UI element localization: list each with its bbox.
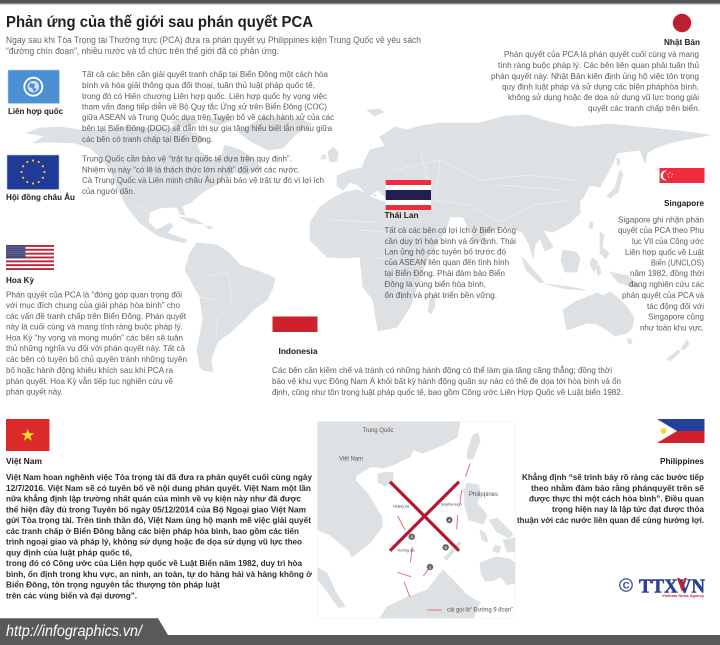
text block: tác động đối với — [647, 301, 704, 311]
text block: trình ngoại giao và pháp lý, không sử dụng hoặc đe dọa sử dụng vũ lực theo — [6, 536, 302, 546]
text block: thuận với các nước liên quan để cùng hướng lợi. — [517, 515, 704, 525]
text block — [272, 364, 623, 397]
text block: định, cũng như tôn trọng luật pháp quốc tế, bao gồm Công ước Liên Hợp Quốc về Luật biển 1982. — [272, 387, 623, 397]
text block: phán quyết này. — [6, 386, 63, 396]
logo: TTXVN: C — [623, 580, 630, 592]
text block: lục VII của Công ước — [632, 236, 704, 246]
footer bar — [0, 618, 720, 645]
text block: theo nhằm đảm bảo rằng phánquyết trên sẽ — [531, 482, 704, 493]
text block: Cả Trung Quốc và Liên minh châu Âu phải bảo vệ trật tự đó vì lợi ích — [82, 175, 324, 185]
logo: TTXVN: TTXVN — [639, 576, 706, 598]
chart: South China Sea map — [318, 422, 515, 618]
text block: các bên có tuyên bố chủ quyền tránh những tuyên — [6, 354, 187, 364]
panel: Singapore — [618, 168, 705, 332]
text block: trên các vùng biển và đại dương”. — [6, 590, 137, 600]
icon: Singapore flag — [660, 168, 704, 183]
text block — [491, 49, 700, 113]
label: Nhật Bản — [664, 37, 700, 47]
label: Hoa Kỳ — [6, 275, 34, 285]
text block: Hoa Kỳ “hy vọng và mong muốn” các bên sẽ tuân — [6, 332, 183, 342]
map labels: Scarborough — [441, 502, 462, 506]
text block: Các bên cần kiềm chế và tránh có những hành động có thể làm gia tăng căng thẳng; đồng thời — [272, 364, 612, 375]
panel: Indonesia — [272, 316, 623, 397]
text block: Biển Đông, tôn trọng nguyên tắc thượng tôn pháp luật — [6, 578, 220, 590]
numbered markers: 4 — [448, 518, 451, 522]
numbered markers — [408, 517, 452, 570]
text block — [517, 471, 704, 525]
text block: Việt Nam hoan nghênh việc Tòa trọng tài đã đưa ra phán quyết cuối cùng ngày — [6, 472, 312, 482]
panel: Việt Nam — [6, 419, 312, 600]
text block: Sigapore ghi nhận phán — [618, 214, 704, 224]
panel: Hội đồng châu Âu — [6, 154, 324, 202]
map labels: Việt Nam — [339, 456, 363, 462]
icon: Thailand flag — [386, 180, 431, 210]
text block: Phán quyết của PCA là phán quyết cuối cùng và mang — [504, 49, 699, 59]
map labels: Hoàng Sa — [393, 504, 409, 508]
text block — [384, 225, 516, 300]
text block: Tất cả các bên cần giải quyết tranh chấp tại Biển Đông một cách hòa — [82, 69, 328, 79]
numbered markers: 2 — [411, 535, 413, 539]
land masses — [318, 422, 515, 618]
text block: Liên hợp quốc về Luật — [625, 247, 705, 257]
text block: phán quyết. Hoa Kỳ vẫn tiếp tục nghiên cứu về — [6, 376, 173, 386]
icon: US flag — [6, 245, 54, 270]
text block: tại Biển Đông. Phải đảm bảo Biển — [384, 268, 505, 278]
text block: bên tại Biển Đông (DOC) sẽ dẫn tới sự gia tăng hiểu biết lẫn nhau giữa — [82, 123, 332, 133]
label: Singapore — [664, 198, 704, 208]
text block: phán quyết của PCA và — [622, 290, 704, 300]
text block: thể hiện đầy đủ trong Tuyên bố ngày 05/12/2014 của Bộ Ngoại giao Việt Nam — [6, 504, 306, 514]
title: Phản ứng của thế giới sau phán quyết PCA — [6, 14, 313, 31]
map labels: Trung Quốc — [362, 428, 394, 434]
text block: của người dân. — [82, 186, 135, 196]
text block: các vấn đề tranh chấp trên Biển Đông. Phán quyết — [6, 311, 187, 321]
text block: các bên có tranh chấp tại Biển Đông. — [82, 134, 213, 144]
text block: trọng hiện nay là lập tức đạt được thỏa — [552, 504, 704, 514]
text block: tính ràng buộc pháp lý. Các bên liên quan phải tuân thủ — [498, 60, 699, 70]
text block: ổn định và phát triển bền vững. — [384, 290, 497, 300]
text block: Đông là vùng biển hòa bình, — [384, 279, 486, 289]
map labels: cái gọi là“ Đường 9 đoạn” — [447, 608, 513, 614]
map labels: Philippines — [469, 492, 498, 498]
icon: UN flag — [8, 70, 60, 104]
text block: trong đó có Hiến chương Liên hợp quốc. Liên hợp quốc hy vọng việc — [82, 91, 327, 101]
label: Indonesia — [278, 346, 318, 356]
nine-dash line — [397, 463, 470, 597]
label: Việt Nam — [6, 456, 42, 466]
panel: Liên hợp quốc — [8, 69, 334, 144]
intro text: Ngay sau khi Tòa Trọng tài Thường trực (PCA) đưa ra phán quyết vụ Philippines kiện Trung Quốc về yêu sách — [6, 35, 421, 46]
label: Philippines — [660, 456, 704, 466]
label: Liên hợp quốc — [8, 106, 63, 116]
text block: các tranh chấp ở Biển Đông bằng các biện pháp hòa bình, bao gồm các tiến — [6, 525, 299, 536]
text block: Khẳng định “sẽ trình bày rõ ràng các bước tiếp — [522, 471, 704, 482]
text block: quy định luật pháp và sử dụng các biện pháphòa bình, — [502, 82, 699, 92]
text block: bình, ổn định trong khu vực, an ninh, an toàn, tự do hàng hải và hàng không ở — [6, 569, 312, 579]
text block: Nhiệm vụ này “có lẽ là thách thức lớn nhất” đối với các nước. — [82, 164, 300, 174]
label: Hội đồng châu Âu — [6, 191, 75, 202]
text block: Lan ủng hộ các tuyên bố trước đó — [384, 246, 506, 256]
text block — [618, 214, 705, 332]
map legend line — [428, 609, 442, 611]
text block: không sử dụng hoặc đe dọa sử dụng vũ lực trong giải — [508, 92, 699, 102]
icon: Philippines flag — [657, 419, 704, 443]
text block: phán quyết này. Nhật Bản kiên định ủng hộ việc tôn trọng — [491, 71, 699, 81]
text block: Tất cả các bên có lợi ích ở Biển Đông — [384, 225, 516, 235]
text block: Singapore cũng — [648, 312, 704, 322]
text block: thủ những nghĩa vụ đối với phán quyết này. Tất cả — [6, 343, 185, 353]
text block: của ASEAN liên quan đến tình hình — [384, 257, 509, 267]
text block: trong đó có Công ước của Liên hợp quốc về Luật Biển năm 1982, duy trì hòa — [6, 558, 302, 568]
text block: giữa ASEAN và Trung Quốc dựa trên Tuyên bố về cách hành xử của các — [82, 112, 334, 122]
text block: Biển (UNCLOS) — [651, 258, 704, 268]
map labels — [339, 428, 513, 614]
intro text: “đường chín đoạn”, nhiều nước và tổ chức trên thế giới đã có phản ứng. — [6, 46, 279, 57]
text block — [6, 472, 312, 600]
panel: Thái Lan — [384, 180, 516, 300]
red cross — [390, 482, 459, 551]
text block: quyết của PCA theo Phụ — [618, 225, 704, 235]
panel: Philippines — [517, 419, 704, 525]
text block: nữa khẳng định lập trường nhất quán của mình về vụ kiện này như đã được — [6, 492, 301, 504]
text block: năm 1982, đồng thời — [630, 268, 704, 278]
text block: Phán quyết của PCA là “đóng góp quan trọng đối — [6, 290, 182, 300]
numbered markers: 3 — [445, 546, 447, 550]
text block: bảo vệ khu vực Đông Nam Á khỏi bất kỳ hành động quân sự nào có thể đe dọa tới hòa bình và ổn — [272, 376, 621, 386]
text block: được thực thi một cách hòa bình”. Điều quan — [529, 494, 704, 504]
logo: TTXVN: Vietnam News Agency — [662, 594, 705, 598]
text block — [6, 290, 187, 396]
icon: Indonesia flag — [272, 316, 318, 332]
text block: này là cuối cùng và mang tính ràng buộc pháp lý. — [6, 322, 183, 332]
icon: EU flag — [7, 155, 59, 190]
panel: Nhật Bản — [491, 14, 700, 113]
text block: 12/7/2016. Việt Nam sẽ có tuyên bố về nội dung phán quyết. Việt Nam một lần — [6, 483, 311, 493]
text block: đang nghiên cứu các — [629, 279, 704, 289]
text block — [82, 154, 324, 196]
text block: cần duy trì hòa bình và ổn định. Thái — [384, 236, 516, 246]
text block: quy định của luật pháp quốc tế, — [6, 547, 132, 557]
text block: với mục đích chung của giải pháp hòa bình” cho — [6, 300, 180, 310]
intro text — [6, 35, 421, 57]
text block: gửi Tòa trọng tài. Trên tinh thần đó, Việt Nam ủng hộ mạnh mẽ việc giải quyết — [6, 515, 311, 525]
icon: Vietnam flag — [6, 419, 50, 451]
map labels: Trường Sa — [397, 548, 414, 552]
text block: bố hoặc hành động khiêu khích sau khi PCA ra — [6, 365, 173, 375]
text block: như toàn khu vực. — [640, 322, 704, 332]
world map background — [27, 109, 710, 372]
text block: tham vấn đang tiếp diễn về Bộ Quy tắc Ứng xử trên Biển Đông (COC) — [82, 102, 327, 112]
top bar — [0, 0, 720, 5]
label: Thái Lan — [384, 210, 418, 220]
text block: Trung Quốc cần bảo vệ “trật tự quốc tế dựa trên quy định”. — [82, 154, 292, 164]
text block: bình và hòa giải thông qua đối thoại, tuân thủ luật pháp quốc tế, — [82, 80, 315, 90]
text block: quyết các tranh chấp trên biển. — [588, 103, 700, 113]
footer bar: http://infographics.vn/ — [6, 623, 144, 640]
text block — [82, 69, 334, 144]
numbered markers: 1 — [429, 566, 431, 570]
panel: Hoa Kỳ — [6, 245, 187, 396]
icon: Japan flag — [673, 14, 691, 32]
